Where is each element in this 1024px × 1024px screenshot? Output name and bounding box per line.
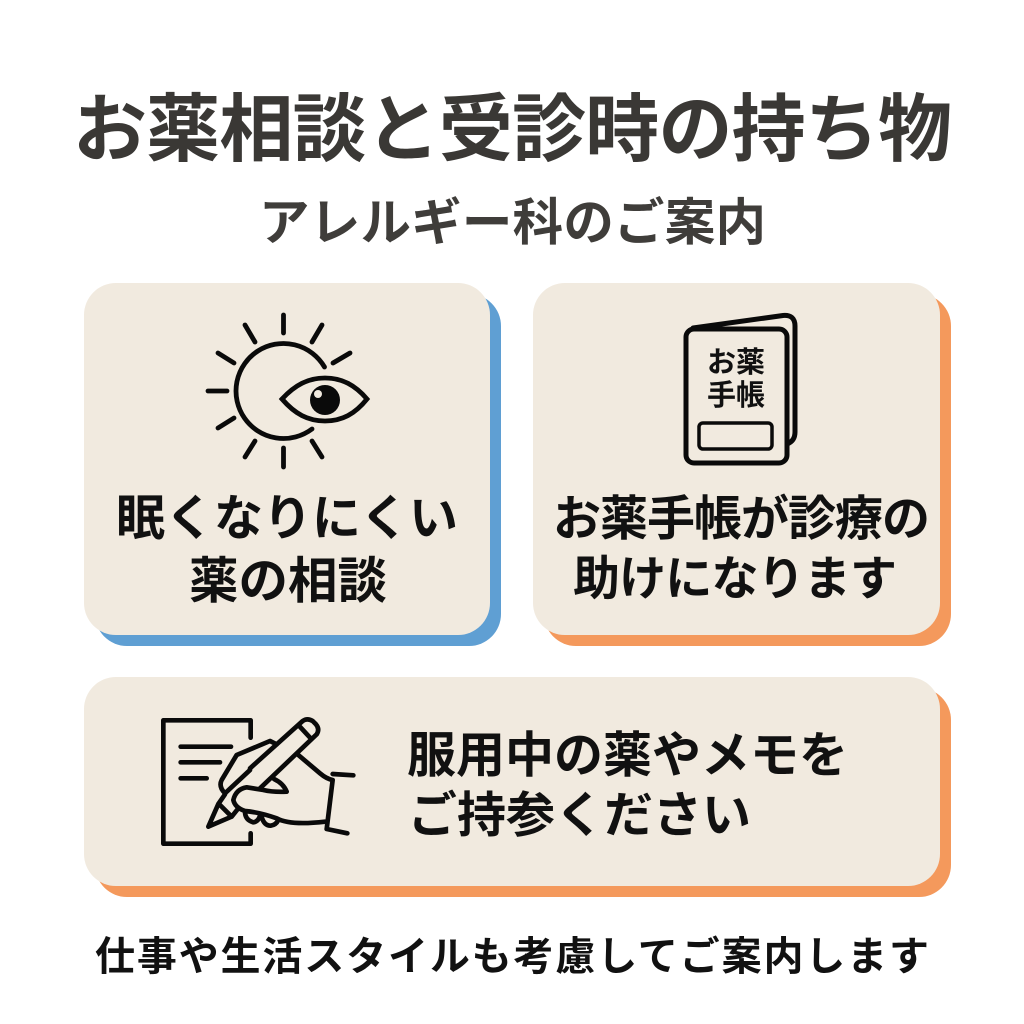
card shadow: blue	[95, 294, 501, 646]
icon: hand writing on paper	[163, 719, 353, 844]
panel: sleep-friendly medicine consultation	[84, 283, 501, 646]
card body	[84, 283, 490, 635]
subtitle: アレルギー科のご案内	[259, 194, 766, 251]
footer note: 仕事や生活スタイルも考慮してご案内します	[95, 935, 929, 979]
card text: 薬の相談	[189, 554, 387, 609]
card body	[84, 677, 940, 886]
card text: 服用中の薬やメモを	[407, 729, 848, 783]
card text	[553, 493, 930, 605]
card text: 眠くなりにくい	[116, 492, 458, 546]
card shadow: orange	[544, 294, 951, 646]
card text: ご持参ください	[408, 789, 751, 843]
icon: sun and eye	[208, 315, 367, 467]
panel: bring your medicines and notes	[84, 677, 951, 897]
icon: medicine notebook: お薬	[707, 346, 765, 379]
icon: medicine notebook	[686, 315, 795, 463]
title: お薬相談と受診時の持ち物	[73, 88, 952, 171]
card text: 助けになります	[573, 552, 897, 605]
card text	[407, 729, 848, 843]
panel: medicine notebook	[533, 283, 951, 646]
card text	[116, 492, 458, 609]
card shadow: orange	[95, 688, 951, 897]
card text: お薬手帳が診療の	[553, 493, 930, 546]
icon: medicine notebook: 手帳	[707, 379, 765, 412]
card body	[533, 283, 940, 635]
